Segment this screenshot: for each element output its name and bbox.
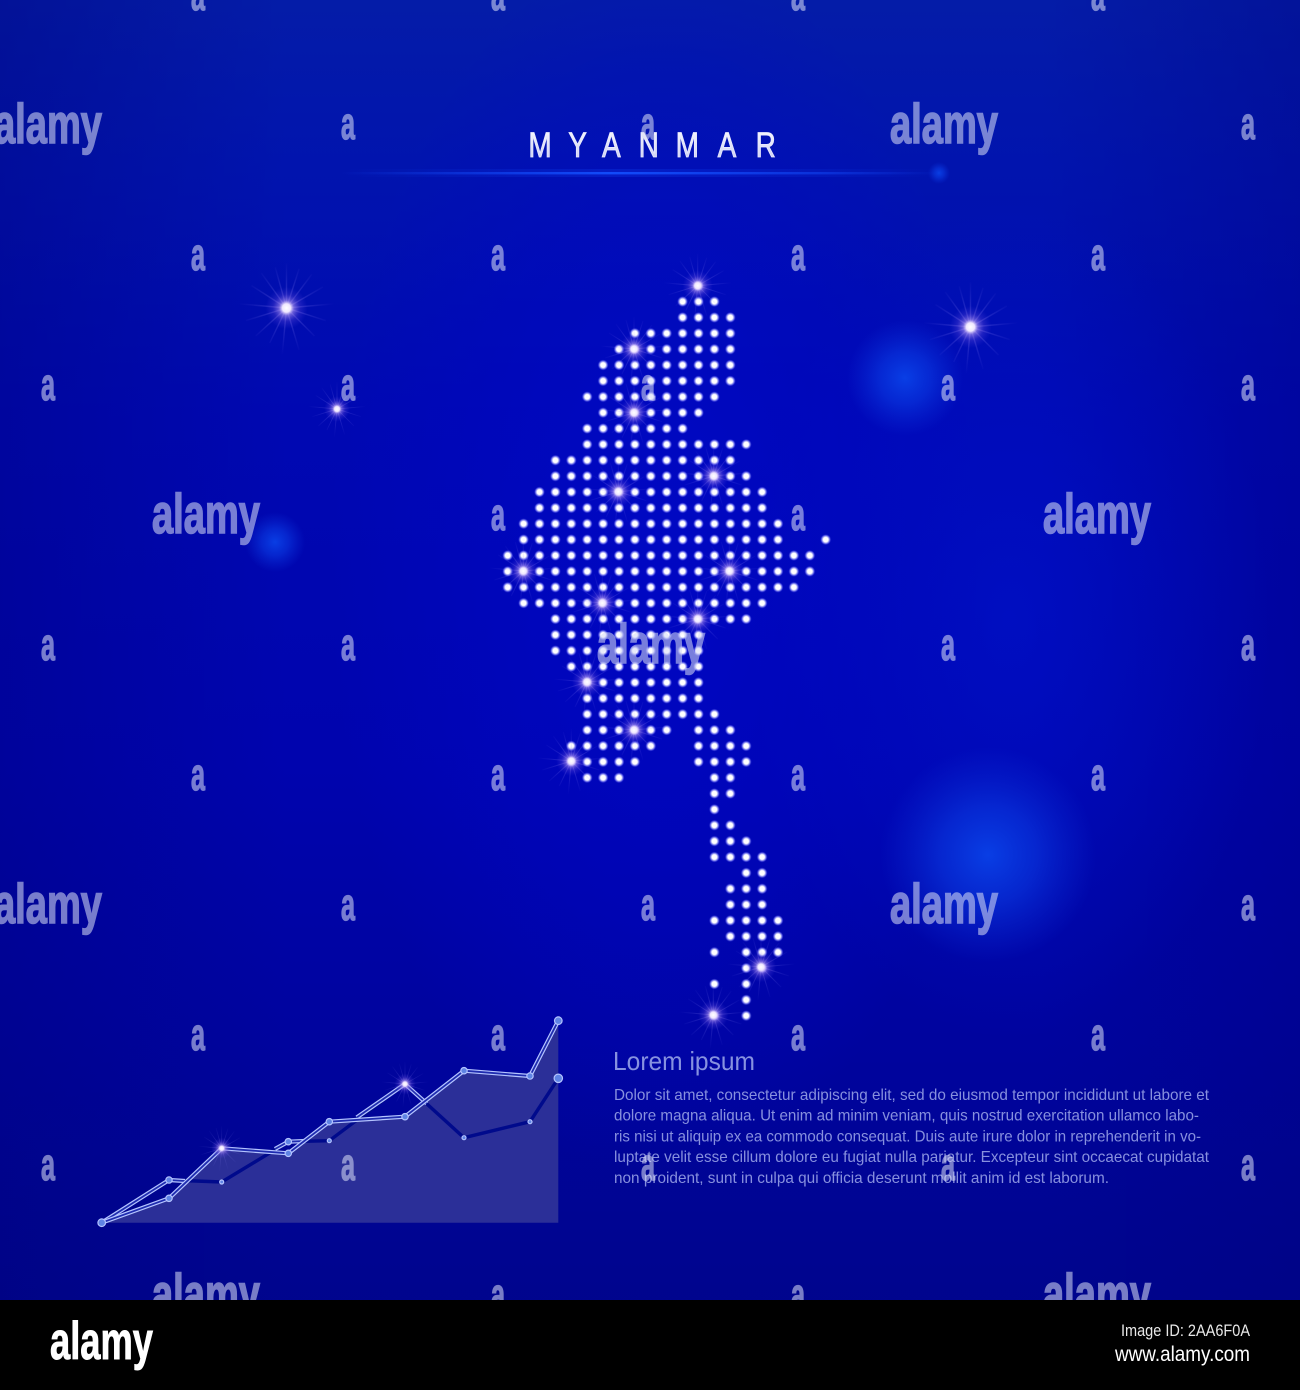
star: upper right [923, 282, 1018, 373]
glow spot: lower right [880, 747, 1096, 963]
footer bar [0, 1300, 1300, 1390]
watermark pattern: a [641, 98, 656, 149]
watermark pattern: a [491, 229, 506, 280]
watermark pattern: alamy [1043, 1262, 1151, 1325]
watermark pattern: a [1241, 619, 1256, 670]
watermark pattern: alamy [1043, 482, 1151, 545]
watermark pattern: a [191, 1009, 206, 1060]
watermark pattern: a [41, 1139, 56, 1190]
watermark pattern: alamy [890, 92, 998, 155]
watermark pattern: a [341, 619, 356, 670]
watermark pattern: a [791, 749, 806, 800]
glow spot: upper right [847, 320, 963, 436]
glow spot: left [245, 512, 305, 572]
watermark pattern: a [1241, 98, 1256, 149]
line chart [98, 1017, 562, 1226]
title underline with glow [340, 162, 950, 184]
watermark pattern: a [191, 229, 206, 280]
text paragraph: luptate velit esse cillum dolore eu fugiat nulla pariatur. Excepteur sint occaecat cupidatat [614, 1149, 1210, 1166]
chart glows [198, 1062, 429, 1171]
watermark pattern: a [1091, 229, 1106, 280]
watermark pattern: a [41, 359, 56, 410]
dotted map of Myanmar [500, 278, 834, 1024]
second series outlined segments [102, 1084, 427, 1223]
watermark pattern: alamy [597, 612, 705, 675]
website: www.alamy.com [1114, 1343, 1250, 1366]
watermark pattern: a [341, 1139, 356, 1190]
watermark pattern: a [341, 359, 356, 410]
watermark pattern: a [491, 489, 506, 540]
title: MYANMAR [528, 125, 776, 165]
watermark pattern: alamy [152, 482, 260, 545]
text heading: Lorem ipsum [613, 1046, 755, 1076]
chart area fill [102, 1021, 558, 1223]
watermark pattern: a [941, 359, 956, 410]
watermark pattern: a [941, 619, 956, 670]
watermark pattern: a [491, 1269, 506, 1320]
text paragraph: ris nisi ut aliquip ex ea commodo consequat. Duis aute irure dolor in reprehenderit in vo- [614, 1128, 1201, 1145]
watermark pattern: a [491, 1009, 506, 1060]
watermark pattern: a [1091, 1009, 1106, 1060]
watermark pattern: a [1091, 749, 1106, 800]
watermark pattern: a [341, 98, 356, 149]
watermark pattern: alamy [152, 1262, 260, 1325]
watermark pattern: a [791, 1269, 806, 1320]
image id: Image ID: 2AA6F0A [1121, 1321, 1251, 1340]
star: upper left [239, 263, 334, 354]
watermark pattern: a [641, 1139, 656, 1190]
text paragraph: Dolor sit amet, consectetur adipiscing elit, sed do eiusmod tempor incididunt ut labore et [614, 1087, 1210, 1104]
star: small left [308, 382, 366, 437]
watermark pattern: a [791, 229, 806, 280]
watermark pattern: a [641, 359, 656, 410]
watermark pattern: a [41, 619, 56, 670]
watermark pattern: a [491, 749, 506, 800]
watermark pattern: a [791, 1009, 806, 1060]
first series outlined line [102, 1021, 558, 1223]
text paragraph: non proident, sunt in culpa qui officia deserunt mollit anim id est laborum. [614, 1170, 1109, 1187]
watermark pattern: a [791, 489, 806, 540]
footer logo: alamy [50, 1312, 153, 1371]
watermark pattern: a [941, 1139, 956, 1190]
watermark pattern: alamy [890, 872, 998, 935]
watermark pattern: a [341, 879, 356, 930]
watermark pattern: a [1241, 359, 1256, 410]
watermark pattern: a [641, 879, 656, 930]
bright map nodes [489, 254, 795, 1048]
text paragraph [614, 1087, 1210, 1187]
watermark pattern: a [1241, 1139, 1256, 1190]
watermark pattern: a [191, 749, 206, 800]
second series dark line [169, 1078, 558, 1182]
text paragraph: dolore magna aliqua. Ut enim ad minim veniam, quis nostrud exercitation ullamco labo- [614, 1108, 1199, 1125]
watermark pattern: a [1241, 879, 1256, 930]
chart nodes [98, 1017, 562, 1226]
